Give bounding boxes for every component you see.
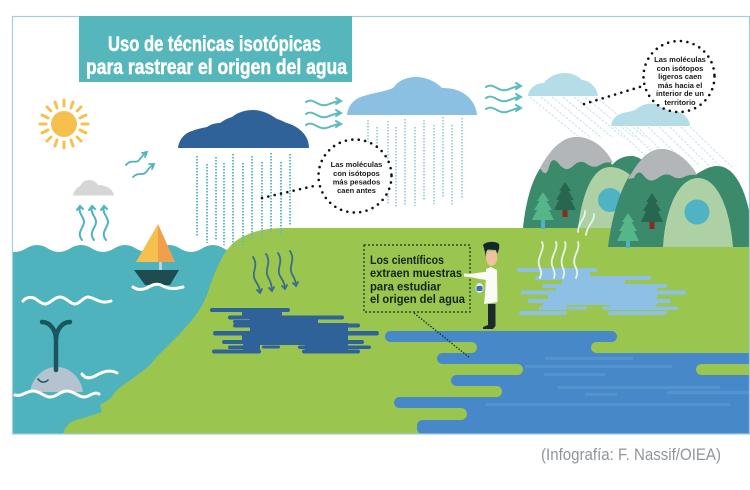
heavy rain [197, 153, 290, 245]
steam over dark puddle [253, 251, 298, 293]
callout: heavy isotopes: Las moléculas [331, 160, 382, 169]
title banner: para rastrear el origen del agua [86, 56, 347, 79]
callout: heavy isotopes: con isótopos [333, 169, 380, 178]
callout: light isotopes: con isótopos [657, 64, 703, 73]
callout: heavy isotopes: más pesados [333, 178, 380, 186]
large lake [385, 331, 750, 434]
scientist figure [464, 242, 499, 329]
callout: light isotopes: territorio [664, 98, 696, 107]
steam over light puddle [539, 242, 579, 278]
leader: heavy isotopes [262, 185, 318, 198]
callout: light isotopes: más hacia el [658, 81, 702, 90]
sea [13, 245, 227, 434]
callout: heavy isotopes [318, 140, 392, 212]
light cloud two [611, 104, 690, 126]
icon: whale [15, 322, 99, 397]
land [63, 228, 750, 434]
callout: scientists note: el origen del agua [370, 292, 465, 306]
tree: dark left [554, 182, 576, 217]
medium rain [368, 117, 462, 208]
light puddle [517, 268, 686, 315]
evaporation arrows from sea [77, 206, 108, 240]
callout: heavy isotopes: caen antes [337, 186, 376, 195]
wind arrows right [486, 83, 521, 112]
icon: sailboat [133, 224, 183, 289]
tree: dark right [641, 193, 663, 229]
callout: scientists note: Los científicos [370, 253, 444, 267]
callout: scientists note [364, 245, 470, 312]
tree: light left [532, 192, 554, 229]
gray cloud [73, 180, 114, 196]
light cloud one [528, 73, 598, 96]
steam near mountains [578, 211, 594, 235]
blue cloud [347, 77, 477, 115]
credit caption: (Infografía: F. Nassif/OIEA) [541, 445, 721, 464]
leader: light isotopes [584, 86, 643, 104]
title banner [79, 16, 352, 82]
lake shoreline inlets [450, 342, 720, 420]
callout: scientists note: para estudiar [370, 280, 441, 294]
sea white waves [23, 297, 117, 378]
callout: scientists note: extraen muestras [370, 266, 462, 280]
callout: light isotopes: interior de un [656, 89, 704, 98]
tree: light right [617, 213, 639, 248]
callout: light isotopes [644, 41, 714, 112]
wind arrows small [126, 152, 154, 177]
diagonal light rain [530, 97, 733, 172]
mountain group right [608, 149, 750, 247]
dark cloud [178, 110, 309, 148]
lake highlights [486, 357, 750, 406]
icon: sun [40, 100, 88, 148]
dark puddle [210, 308, 379, 354]
callout: light isotopes: Las moléculas [654, 55, 706, 64]
title banner: Uso de técnicas isotópicas [108, 33, 321, 56]
wind arrows middle [306, 98, 341, 128]
mountain group left [523, 137, 650, 228]
callout: light isotopes: ligeros caen [658, 72, 702, 81]
panel: landscape scene [0, 137, 750, 434]
leader: note to lake [414, 313, 470, 358]
